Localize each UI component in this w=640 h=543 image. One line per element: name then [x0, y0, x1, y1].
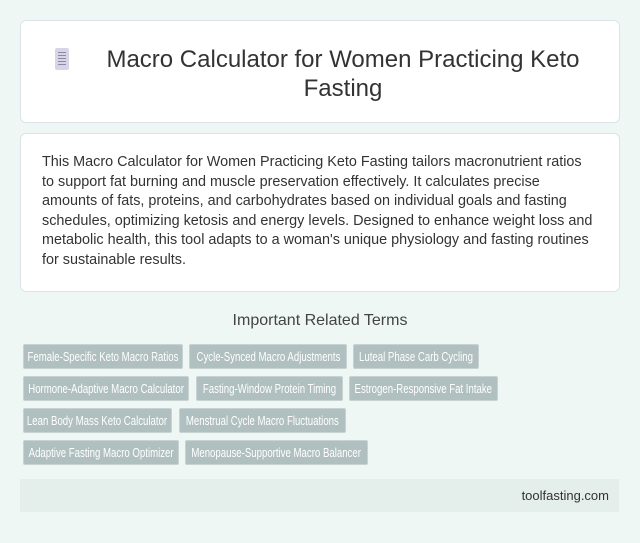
- heading: related terms: Important Related Terms: [233, 312, 407, 329]
- description text: [42, 154, 592, 268]
- tags: Lean Body Mass Keto Calculator: [27, 414, 168, 428]
- tags: Fasting-Window Protein Timing: [203, 382, 336, 396]
- title: Macro Calculator for Women Practicing Keto Fasting: [106, 46, 580, 102]
- icon: scroll document: [55, 48, 69, 70]
- tags: Menstrual Cycle Macro Fluctuations: [186, 414, 339, 428]
- title card: [20, 20, 620, 123]
- description text: metabolic health, this tool adapts to a woman's unique physiology and fasting routines: [42, 232, 589, 248]
- tags: Cycle-Synced Macro Adjustments: [196, 350, 340, 364]
- description text: schedules, optimizing ketosis and energy levels. Designed to enhance weight loss and: [42, 212, 592, 228]
- description text: to support fat burning and muscle preservation effectively. It calculates precise: [42, 174, 540, 190]
- description text: amounts of fats, proteins, and carbohydrates based on individual goals and fasting: [42, 193, 567, 209]
- tags: Hormone-Adaptive Macro Calculator: [28, 382, 184, 396]
- description text: This Macro Calculator for Women Practicing Keto Fasting tailors macronutrient ratios: [42, 154, 582, 170]
- description card: [20, 133, 620, 292]
- tags: Menopause-Supportive Macro Balancer: [192, 446, 361, 460]
- tags: Luteal Phase Carb Cycling: [359, 350, 473, 364]
- tags: Adaptive Fasting Macro Optimizer: [29, 446, 173, 460]
- footer text: toolfasting.com: [522, 488, 609, 503]
- tags: Female-Specific Keto Macro Ratios: [28, 350, 178, 364]
- tags: Estrogen-Responsive Fat Intake: [355, 382, 492, 396]
- description text: for sustainable results.: [42, 252, 186, 268]
- footer: [20, 479, 619, 512]
